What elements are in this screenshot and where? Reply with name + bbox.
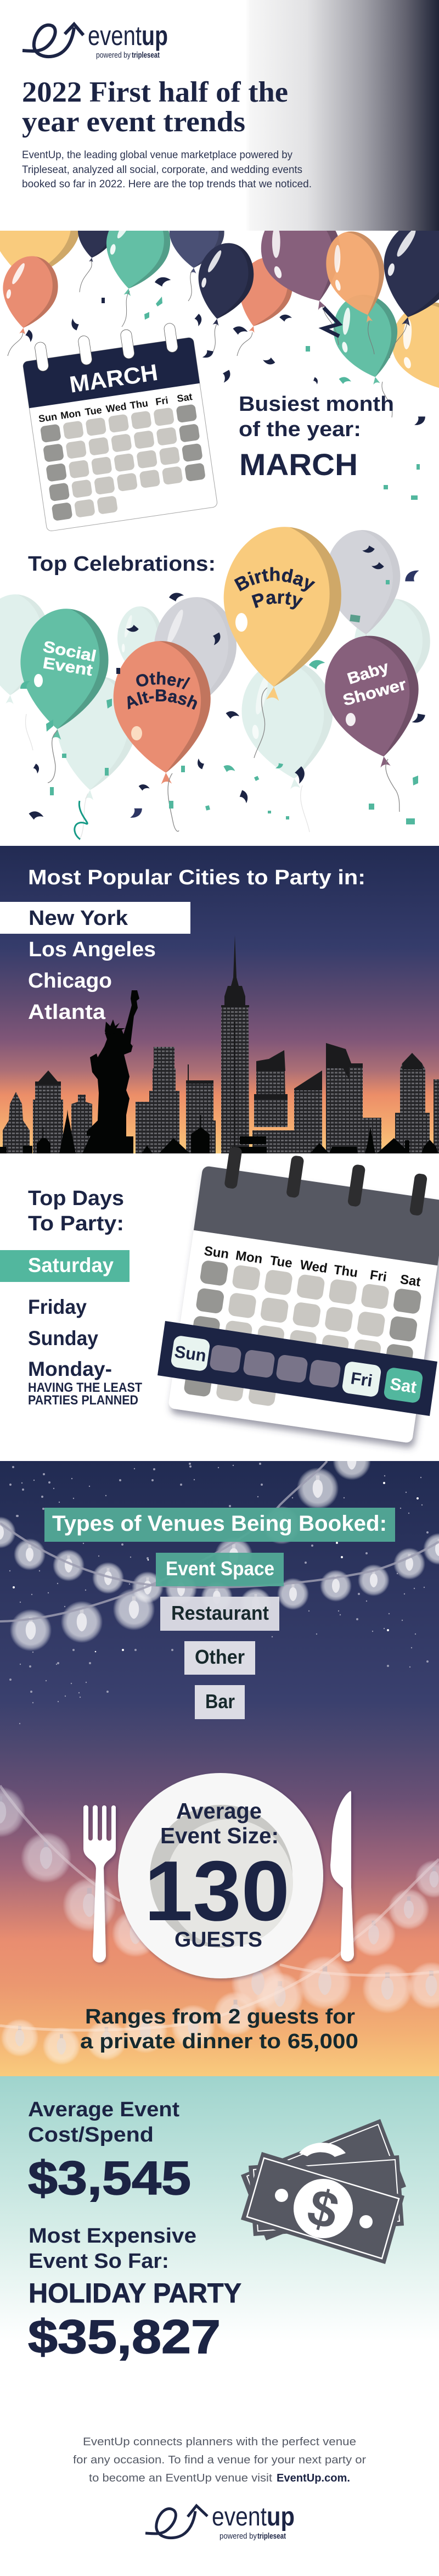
balloon: Other/Alt-Bash: Alt-Bash xyxy=(127,689,197,710)
heading: top days xyxy=(28,1187,124,1235)
venue: Event Space: Event Space xyxy=(166,1557,274,1580)
panel: header xyxy=(0,0,439,231)
balloon: Birthday Party xyxy=(224,527,341,758)
heading box: venue types: Types of Venues Being Booked: xyxy=(52,1512,387,1536)
icon: plate with event size xyxy=(118,1773,323,1978)
calendar: weekend xyxy=(157,1145,439,1443)
footer text: EventUp.com. xyxy=(277,2472,350,2484)
balloon: Social Event: Social xyxy=(42,638,98,666)
weekday labels xyxy=(38,391,193,425)
icon: money xyxy=(241,2119,406,2264)
list: cities xyxy=(0,902,190,1024)
weekday labels: Sun xyxy=(38,411,58,425)
list: days: Monday- xyxy=(28,1358,112,1380)
list: days: Saturday xyxy=(28,1254,114,1276)
logo: event xyxy=(88,20,142,51)
logo xyxy=(22,20,168,60)
weekday labels: Tue xyxy=(85,404,103,417)
list: cities: Atlanta xyxy=(28,1001,106,1024)
balloon: Social Event: Event xyxy=(42,654,94,679)
heading box: venue types xyxy=(44,1508,395,1542)
venue: Bar: Bar xyxy=(205,1690,235,1713)
list: cities: Chicago xyxy=(28,969,112,993)
most expensive event: $35,827 xyxy=(28,2311,221,2363)
balloon: Baby Shower xyxy=(317,628,431,812)
footer logo: event xyxy=(212,2502,267,2532)
panel: popular cities xyxy=(0,846,439,1153)
venue: Bar xyxy=(195,1685,245,1719)
weekday labels: Sat xyxy=(399,1272,421,1290)
average cost: $3,545 xyxy=(28,2152,191,2205)
panel: busiest month xyxy=(0,174,439,532)
icon: plate with event size: 130 xyxy=(144,1843,290,1938)
intro text: booked so far in 2022. Here are the top trends that we noticed. xyxy=(22,179,312,190)
title: 2022 First half of the xyxy=(22,76,288,108)
panel: top days xyxy=(0,1145,439,1443)
balloon: Birthday Party: Birthday xyxy=(234,567,316,592)
balloons cluster xyxy=(0,174,439,410)
balloon: Other/Alt-Bash xyxy=(113,641,211,832)
heading: busiest month xyxy=(239,393,394,482)
range text: a private dinner to 65,000 xyxy=(80,2030,358,2053)
average cost xyxy=(28,2098,191,2205)
range text xyxy=(80,2005,358,2053)
logo: up xyxy=(142,20,168,51)
venue: Restaurant xyxy=(160,1597,279,1631)
panel: venues and event size xyxy=(0,1442,439,2076)
most expensive event: Event So Far: xyxy=(29,2250,169,2273)
heading: top days: To Party: xyxy=(28,1212,124,1235)
logo: tripleseat xyxy=(132,51,160,60)
icon: knife xyxy=(330,1791,354,1961)
title xyxy=(22,76,288,138)
average cost: Cost/Spend xyxy=(28,2123,154,2146)
background balloons xyxy=(0,528,433,804)
panel: event cost xyxy=(0,2076,439,2363)
balloon: Baby Shower: Baby xyxy=(345,658,391,688)
calendar title: MARCH xyxy=(68,359,160,398)
list: days xyxy=(0,1250,142,1408)
most expensive event: Most Expensive xyxy=(29,2224,196,2248)
footer logo: powered by xyxy=(219,2532,257,2541)
icon: plate with event size: Event Size: xyxy=(160,1823,279,1848)
list: cities: New York xyxy=(29,907,128,930)
string lights xyxy=(0,1442,439,2065)
list: cities: Los Angeles xyxy=(29,938,156,961)
balloon: Social Event xyxy=(13,604,114,783)
date cells xyxy=(40,404,209,521)
footer text: to become an EventUp venue visit xyxy=(89,2472,272,2484)
heading: busiest month: MARCH xyxy=(239,447,358,482)
list: days: HAVING THE LEAST xyxy=(28,1380,142,1395)
logo: powered by xyxy=(96,51,131,60)
stars xyxy=(10,1464,427,1724)
pale strings xyxy=(25,714,309,840)
list: days: Sunday xyxy=(28,1327,98,1350)
icon: money: $ xyxy=(302,2177,345,2240)
footer text: EventUp connects planners with the perfect venue xyxy=(83,2436,356,2448)
panel: top celebrations xyxy=(0,527,430,840)
weekday labels: Fri xyxy=(155,395,169,408)
footer logo xyxy=(145,2502,295,2541)
venue: Other xyxy=(184,1641,255,1675)
balloon strings xyxy=(8,259,407,417)
weekday labels xyxy=(203,1244,421,1290)
icon: plate with event size: GUESTS xyxy=(175,1928,262,1951)
heading: top days: Top Days xyxy=(28,1187,124,1210)
weekday labels: Tue xyxy=(269,1253,293,1271)
icon: plate with event size: Average xyxy=(176,1798,262,1824)
weekend band xyxy=(157,1321,437,1416)
balloon: Baby Shower: Shower xyxy=(341,676,408,710)
balloon: Birthday Party: Party xyxy=(251,592,303,610)
confetti xyxy=(24,274,425,425)
most expensive event xyxy=(28,2224,241,2363)
date cells xyxy=(183,1260,422,1425)
most expensive event: HOLIDAY PARTY xyxy=(29,2278,241,2309)
weekday labels: Wed xyxy=(299,1257,328,1276)
intro text: Tripleseat, analyzed all social, corporate, and wedding events xyxy=(22,164,302,176)
heading: cities: Most Popular Cities to Party in: xyxy=(28,866,365,889)
weekday labels: Wed xyxy=(105,401,127,415)
title: year event trends xyxy=(22,106,245,138)
intro text xyxy=(22,149,312,190)
intro text: EventUp, the leading global venue marketplace powered by xyxy=(22,149,292,161)
heading: top celebrations: Top Celebrations: xyxy=(28,553,216,576)
weekday labels: Mon xyxy=(60,408,81,421)
weekday labels: Fri xyxy=(369,1268,388,1285)
venue: Event Space xyxy=(156,1553,284,1586)
heading: busiest month: of the year: xyxy=(239,418,361,441)
weekend band: Fri xyxy=(350,1368,374,1391)
footer text: for any occasion. To find a venue for your next party or xyxy=(73,2454,366,2466)
calendar: March xyxy=(20,320,218,532)
footer logo: tripleseat xyxy=(257,2532,286,2541)
weekday labels: Sun xyxy=(203,1244,230,1262)
range text: Ranges from 2 guests for xyxy=(85,2005,355,2028)
confetti xyxy=(29,544,425,823)
statue of liberty xyxy=(0,990,438,1153)
balloon: Other/Alt-Bash: Other/ xyxy=(136,672,190,689)
heading: busiest month: Busiest month xyxy=(239,393,394,416)
venue: Restaurant: Restaurant xyxy=(171,1602,269,1624)
weekday labels: Mon xyxy=(235,1248,263,1267)
icon: fork xyxy=(83,1805,116,1962)
average cost: Average Event xyxy=(28,2098,179,2121)
weekday labels: Thu xyxy=(130,398,149,411)
venue: Other: Other xyxy=(195,1646,245,1668)
weekday labels: Thu xyxy=(333,1262,359,1280)
list: days: Friday xyxy=(28,1296,87,1318)
footer logo: up xyxy=(267,2502,295,2532)
list: days: PARTIES PLANNED xyxy=(28,1393,138,1408)
skyline xyxy=(0,935,439,1153)
footer text xyxy=(73,2436,366,2484)
weekend band: Sun xyxy=(173,1342,207,1365)
weekend band: Sat xyxy=(389,1374,418,1397)
weekday labels: Sat xyxy=(176,391,193,404)
